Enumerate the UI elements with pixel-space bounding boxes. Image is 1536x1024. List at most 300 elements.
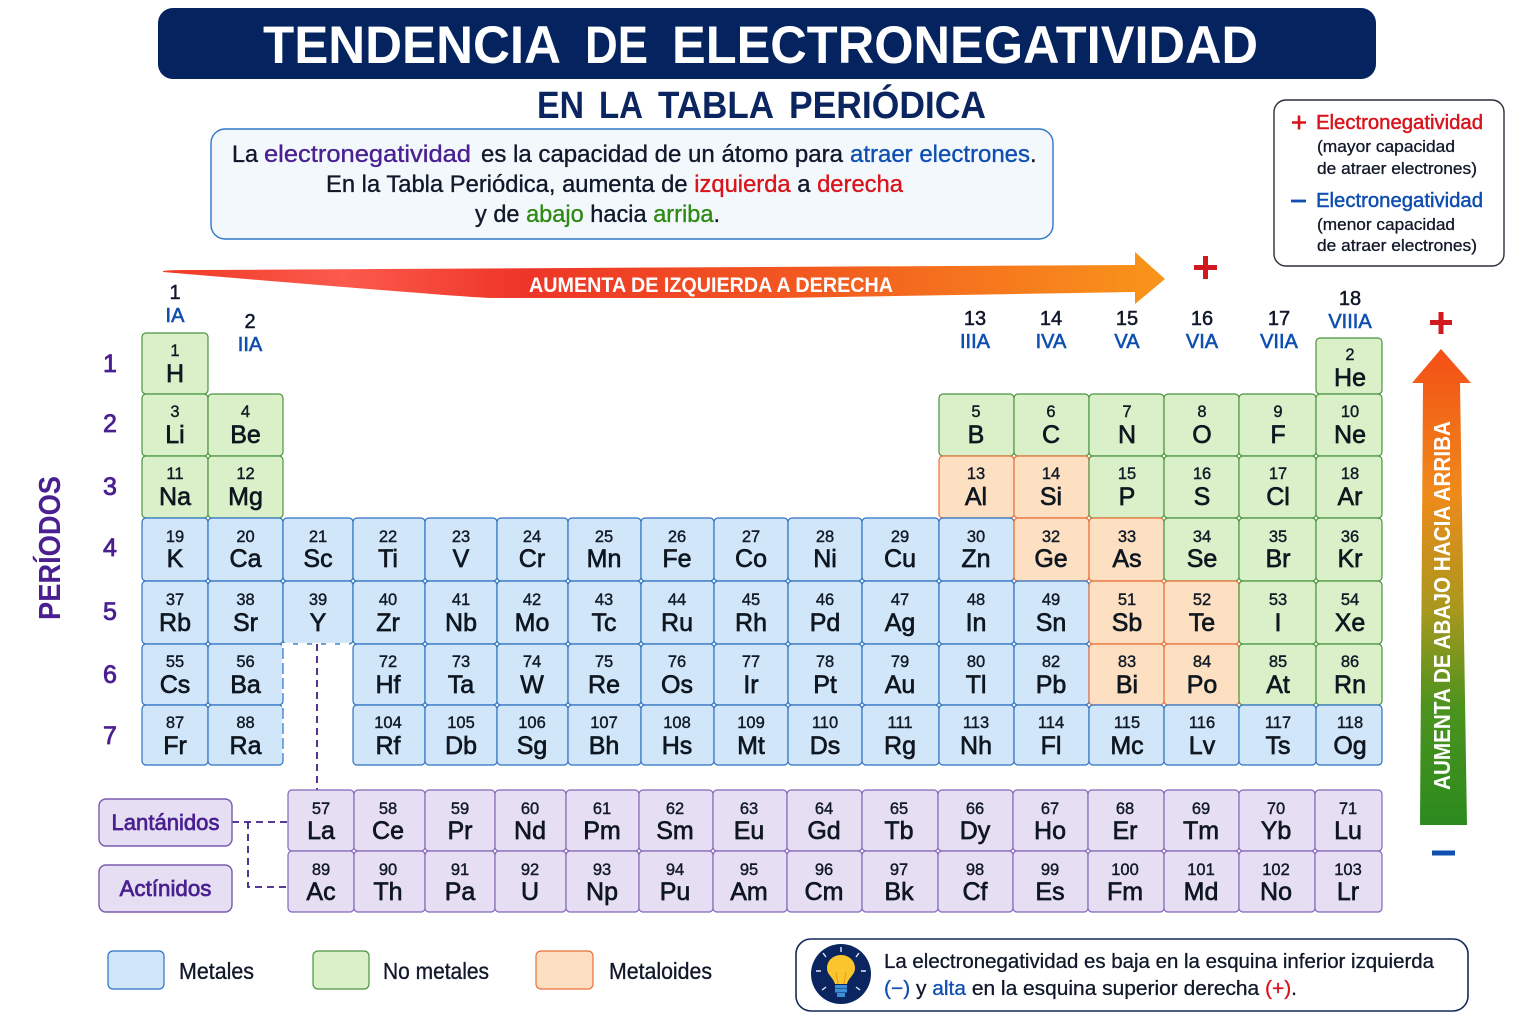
period 5: Sr: [233, 609, 258, 637]
panel: electronegativity key: [1274, 100, 1504, 266]
group headers: 1: [169, 282, 181, 304]
f-block: lanthanides: 61: [593, 800, 611, 818]
period 7: Hs: [662, 732, 692, 760]
f-block: lanthanides: Er: [1112, 817, 1138, 845]
period 6: Os: [661, 671, 693, 699]
period 2: 5: [971, 403, 981, 421]
period 5: 46: [816, 591, 834, 609]
period 4: 19: [166, 528, 184, 546]
period 6: 85: [1269, 653, 1287, 671]
period 3: 11: [166, 465, 184, 483]
period 6: 79: [891, 653, 909, 671]
period 6: Rn: [1334, 671, 1366, 699]
f-block: actinides: Cf: [962, 878, 988, 906]
period 7: Ts: [1266, 732, 1290, 760]
period 7: 111: [887, 714, 913, 732]
period 7: 113: [963, 714, 989, 732]
period 6: Pb: [1036, 671, 1066, 699]
f-block: lanthanides: 62: [666, 800, 684, 818]
f-block: actinides: Np: [586, 878, 618, 906]
period numbers: 6: [103, 661, 117, 689]
f-block: lanthanides: Sm: [656, 817, 694, 845]
period 5: 41: [452, 591, 470, 609]
period 6: 75: [595, 653, 613, 671]
panel: definition: .: [1030, 141, 1037, 168]
period 6: 72: [379, 653, 397, 671]
period 4: Mn: [587, 545, 621, 573]
period numbers: 2: [103, 410, 117, 438]
period 7: Bh: [589, 732, 619, 760]
f-block: actinides: No: [1260, 878, 1292, 906]
period 6: Au: [885, 671, 915, 699]
period 4: Ca: [230, 545, 262, 573]
period 5: 52: [1193, 591, 1211, 609]
period 4: 34: [1193, 528, 1211, 546]
period 6: Tl: [966, 671, 986, 699]
group headers: VA: [1114, 331, 1140, 353]
f-block: lanthanides: Nd: [514, 817, 546, 845]
dashed connectors: [232, 644, 353, 887]
f-block: actinides: 95: [740, 861, 758, 879]
f-block: lanthanides: Dy: [960, 817, 991, 845]
period 4: 20: [236, 528, 255, 546]
period 2: O: [1192, 421, 1212, 449]
period 7: 109: [737, 714, 765, 732]
period 4: Cr: [519, 545, 545, 573]
period 5: I: [1275, 609, 1281, 637]
f-block: lanthanides: 60: [521, 800, 539, 818]
period 3: Al: [965, 483, 987, 511]
f-block: actinides: Cm: [805, 878, 843, 906]
period 5: Ru: [661, 609, 693, 637]
group headers: 2: [244, 311, 256, 333]
f-block: actinides: 97: [890, 861, 908, 879]
period numbers: 1: [103, 350, 117, 378]
period 1: H: [166, 360, 184, 388]
periodic table: main block: [142, 333, 1382, 765]
period 2: 8: [1197, 403, 1207, 421]
f-block: lanthanides: Ce: [372, 817, 404, 845]
f-block: lanthanides: La: [307, 817, 335, 845]
period 2: 3: [170, 403, 180, 421]
period 3: Ar: [1338, 483, 1362, 511]
period 7: 105: [447, 714, 475, 732]
legend: metals: [108, 951, 254, 989]
period 3: Cl: [1266, 483, 1290, 511]
legend: metalloids: [536, 951, 712, 989]
period 5: Rh: [735, 609, 767, 637]
period 7: Nh: [960, 732, 992, 760]
period 4: K: [167, 545, 184, 573]
period 5: Ag: [885, 609, 915, 637]
period 6: 82: [1042, 653, 1060, 671]
period 3: 12: [236, 465, 255, 483]
period 5: 43: [595, 591, 613, 609]
f-block: actinides: 91: [451, 861, 469, 879]
period 2: 6: [1046, 403, 1056, 421]
group headers: IIIA: [960, 331, 991, 353]
period 5: [142, 581, 1382, 644]
period numbers: 4: [103, 534, 117, 562]
panel: definition: atraer electrones: [850, 141, 1030, 168]
period 5: 38: [236, 591, 255, 609]
title banner: DE: [585, 16, 648, 75]
f-block: lanthanides: 59: [451, 800, 469, 818]
period 4: 30: [967, 528, 985, 546]
period 3: 15: [1118, 465, 1136, 483]
period 1: 2: [1345, 346, 1355, 364]
f-block: actinides: Th: [373, 878, 403, 906]
group headers: 15: [1116, 308, 1138, 330]
period 5: Sn: [1036, 609, 1066, 637]
f-block: lanthanides: Gd: [807, 817, 841, 845]
group headers: IA: [166, 305, 185, 327]
subtitle: [537, 83, 986, 127]
f-block: actinides: Pu: [660, 878, 690, 906]
period 6: [142, 644, 1382, 705]
icon: plus top: [1430, 312, 1452, 334]
period 5: Te: [1189, 609, 1215, 637]
period 4: 24: [523, 528, 541, 546]
period 3: 14: [1042, 465, 1060, 483]
period 7: 107: [590, 714, 618, 732]
f-block: actinides: 99: [1041, 861, 1059, 879]
f-block: lanthanides: [288, 790, 1382, 851]
period 4: Se: [1187, 545, 1217, 573]
period 1: He: [1334, 364, 1366, 392]
group headers: 18: [1339, 288, 1361, 310]
subtitle: EN: [537, 85, 584, 127]
period 5: Rb: [159, 609, 191, 637]
period numbers: 3: [103, 473, 117, 501]
legend: non-metals: [313, 951, 489, 989]
f-block: actinides: Am: [730, 878, 768, 906]
group headers: VIA: [1186, 331, 1219, 353]
period 7: 108: [663, 714, 691, 732]
f-block: lanthanides: Pr: [448, 817, 472, 845]
period 6: Pt: [813, 671, 837, 699]
f-block: lanthanides: 65: [890, 800, 908, 818]
period 5: In: [966, 609, 986, 637]
f-block: lanthanides: 69: [1192, 800, 1210, 818]
f-block: actinides: 103: [1334, 861, 1362, 879]
f-block: lanthanides: 71: [1339, 800, 1357, 818]
legend: non-metals: No metales: [383, 958, 489, 984]
period 6: Hf: [376, 671, 401, 699]
period 3: 13: [967, 465, 985, 483]
f-block: actinides: Pa: [445, 878, 475, 906]
panel: definition: [211, 129, 1053, 239]
period 7: 117: [1265, 714, 1291, 732]
arrow: bottom to top: AUMENTA DE ABAJO HACIA ARRIBA: [1429, 421, 1455, 790]
group headers: VIIA: [1260, 331, 1299, 353]
f-block: actinides: Ac: [306, 878, 336, 906]
period 7: 118: [1337, 714, 1363, 732]
group headers: 17: [1268, 308, 1290, 330]
period 4: Ti: [378, 545, 398, 573]
period 3: Si: [1040, 483, 1062, 511]
period 6: 80: [967, 653, 985, 671]
period 5: 40: [379, 591, 397, 609]
period 6: Bi: [1116, 671, 1138, 699]
period 6: 73: [452, 653, 470, 671]
period 4: Ge: [1034, 545, 1068, 573]
period 5: Xe: [1335, 609, 1365, 637]
period 4: [142, 518, 1382, 581]
f-block: lanthanides: Tb: [884, 817, 914, 845]
legend: metals: Metales: [179, 958, 254, 984]
period 7: Mt: [737, 732, 765, 760]
period 7: Mc: [1110, 732, 1144, 760]
period 7: [142, 705, 1382, 765]
f-block: lanthanides: 58: [379, 800, 397, 818]
period 7: Db: [445, 732, 477, 760]
f-block: actinides: U: [521, 878, 539, 906]
period 5: 45: [742, 591, 760, 609]
period 2: Be: [230, 421, 261, 449]
icon: plus right: [1194, 256, 1217, 279]
period 2: 10: [1341, 403, 1359, 421]
period 7: Ds: [810, 732, 840, 760]
f-block: actinides: Lr: [1337, 878, 1359, 906]
period 2: B: [968, 421, 984, 449]
period 6: 55: [166, 653, 184, 671]
period 5: 42: [523, 591, 541, 609]
f-block: lanthanides: 63: [740, 800, 758, 818]
period 6: Ir: [743, 671, 759, 699]
panel: electronegativity key: (mayor capacidad: [1317, 137, 1455, 156]
period 4: 21: [309, 528, 327, 546]
group headers: 14: [1040, 308, 1062, 330]
f-block: lanthanides: 68: [1116, 800, 1134, 818]
subtitle: PERIÓDICA: [789, 83, 986, 127]
period 3: P: [1119, 483, 1135, 511]
period 6: At: [1266, 671, 1290, 699]
period 4: 36: [1341, 528, 1359, 546]
period 4: 25: [595, 528, 613, 546]
period 4: As: [1112, 545, 1142, 573]
period 6: Ta: [448, 671, 474, 699]
subtitle: TABLA: [658, 85, 774, 127]
period 7: 104: [374, 714, 402, 732]
panel: electronegativity key: Electronegatividad: [1316, 112, 1483, 134]
f-block: actinides: 92: [521, 861, 539, 879]
period 5: Mo: [515, 609, 549, 637]
f-block: lanthanides: Eu: [734, 817, 764, 845]
f-block: lanthanides: Pm: [583, 817, 621, 845]
subtitle: LA: [599, 85, 643, 127]
period 5: 49: [1042, 591, 1060, 609]
period 7: 116: [1189, 714, 1215, 732]
f-block: actinides: Es: [1035, 878, 1065, 906]
period 7: Ra: [230, 732, 262, 760]
period numbers: 7: [103, 722, 117, 750]
period 4: Co: [735, 545, 767, 573]
f-block: lanthanides: 64: [815, 800, 833, 818]
period 3: 16: [1193, 465, 1211, 483]
period 5: Sb: [1112, 609, 1142, 637]
f-block: actinides: 98: [966, 861, 984, 879]
f-block: actinides: Fm: [1107, 878, 1143, 906]
panel: electronegativity key: de atraer electrones): [1317, 236, 1477, 255]
period 6: W: [520, 671, 544, 699]
period 6: Po: [1187, 671, 1217, 699]
callout: summary: (−) y alta en la esquina superior derecha (+).: [884, 977, 1297, 1000]
period numbers: [103, 350, 117, 750]
period 5: 47: [891, 591, 909, 609]
period 4: 23: [452, 528, 470, 546]
f-block: lanthanides: 70: [1267, 800, 1285, 818]
period 4: 32: [1042, 528, 1060, 546]
period 7: Rf: [376, 732, 401, 760]
period 7: 114: [1038, 714, 1064, 732]
period numbers: 5: [103, 598, 117, 626]
panel: electronegativity key: Electronegatividad: [1316, 190, 1483, 212]
period 4: Fe: [662, 545, 692, 573]
period 4: 28: [816, 528, 834, 546]
period 3: S: [1194, 483, 1210, 511]
period 2: [142, 394, 1382, 456]
label: actinides: Actínidos: [120, 876, 212, 901]
period 1: 1: [170, 342, 180, 360]
f-block: actinides: 90: [379, 861, 397, 879]
period 7: Sg: [517, 732, 547, 760]
period 4: 22: [379, 528, 397, 546]
arrow: left to right: AUMENTA DE IZQUIERDA A DERECHA: [529, 274, 893, 297]
group headers: [166, 282, 1372, 356]
axis title: periods: PERÍODOS: [32, 476, 67, 620]
period 2: C: [1042, 421, 1060, 449]
period 5: 51: [1118, 591, 1136, 609]
f-block: lanthanides: 66: [966, 800, 984, 818]
callout: summary: [796, 939, 1468, 1011]
period 5: Pd: [810, 609, 840, 637]
period 7: 106: [518, 714, 546, 732]
group headers: IIA: [238, 334, 263, 356]
f-block: actinides: 96: [815, 861, 833, 879]
f-block: lanthanides: Lu: [1334, 817, 1362, 845]
period 4: Sc: [303, 545, 333, 573]
period 3: 17: [1269, 465, 1287, 483]
period 4: Kr: [1338, 545, 1362, 573]
period 4: Zn: [961, 545, 991, 573]
period 4: 35: [1269, 528, 1287, 546]
period 6: 78: [816, 653, 834, 671]
panel: definition: La: [232, 141, 259, 168]
period 5: 44: [668, 591, 686, 609]
period 3: [142, 456, 1382, 518]
panel: definition: electronegatividad: [264, 141, 471, 168]
title banner: ELECTRONEGATIVIDAD: [672, 16, 1258, 75]
period 6: 56: [236, 653, 255, 671]
period 2: F: [1270, 421, 1286, 449]
panel: electronegativity key: de atraer electrones): [1317, 159, 1477, 178]
title banner: TENDENCIA: [263, 16, 561, 75]
period 5: Y: [310, 609, 327, 637]
period 7: 88: [236, 714, 255, 732]
label: lanthanides: Lantánidos: [112, 810, 220, 835]
period 4: 33: [1118, 528, 1136, 546]
period 6: Re: [588, 671, 620, 699]
period 2: 4: [241, 403, 250, 421]
period 2: 7: [1122, 403, 1132, 421]
period 6: 77: [742, 653, 760, 671]
period 7: Rg: [884, 732, 916, 760]
period 6: 86: [1341, 653, 1359, 671]
arrow: bottom to top: [1412, 349, 1471, 825]
title banner: [158, 8, 1376, 79]
period 7: Fl: [1041, 732, 1061, 760]
panel: definition: es la capacidad de un átomo para: [481, 141, 844, 168]
period 1: [142, 333, 1382, 394]
period 2: N: [1118, 421, 1136, 449]
f-block: actinides: 102: [1262, 861, 1290, 879]
group headers: 16: [1191, 308, 1213, 330]
period 2: Li: [165, 421, 185, 449]
period 5: Tc: [592, 609, 616, 637]
period 4: 27: [742, 528, 760, 546]
panel: definition: En la Tabla Periódica, aumenta de izquierda a derecha: [326, 171, 904, 198]
f-block: lanthanides: 57: [312, 800, 330, 818]
period 4: Ni: [813, 545, 837, 573]
period 7: Fr: [163, 732, 187, 760]
f-block: lanthanides: 67: [1041, 800, 1059, 818]
f-block: actinides: 94: [666, 861, 684, 879]
period 7: 110: [812, 714, 838, 732]
f-block: actinides: [288, 851, 1382, 912]
f-block: lanthanides: Ho: [1034, 817, 1066, 845]
period 4: V: [453, 545, 470, 573]
period 7: Lv: [1189, 732, 1216, 760]
period 5: 54: [1341, 591, 1359, 609]
period 3: Na: [159, 483, 191, 511]
icon: light bulb: [811, 944, 871, 1004]
f-block: actinides: 100: [1111, 861, 1139, 879]
period 6: 76: [668, 653, 686, 671]
period 7: Og: [1333, 732, 1367, 760]
f-block: actinides: 89: [312, 861, 330, 879]
period 3: 18: [1341, 465, 1359, 483]
period 7: 87: [166, 714, 184, 732]
f-block: actinides: Md: [1184, 878, 1218, 906]
period 6: Cs: [160, 671, 190, 699]
panel: electronegativity key: (menor capacidad: [1317, 215, 1455, 234]
f-block: lanthanides: Tm: [1183, 817, 1219, 845]
f-block: actinides: Bk: [884, 878, 914, 906]
panel: definition: y de abajo hacia arriba.: [475, 201, 720, 228]
period 6: 83: [1118, 653, 1136, 671]
period 2: Ne: [1334, 421, 1366, 449]
period 7: 115: [1114, 714, 1140, 732]
f-block: actinides: 93: [593, 861, 611, 879]
legend: metalloids: Metaloides: [609, 958, 712, 984]
period 5: 53: [1269, 591, 1287, 609]
period 4: Br: [1266, 545, 1290, 573]
period 6: 84: [1193, 653, 1211, 671]
period 2: 9: [1273, 403, 1283, 421]
period 3: Mg: [228, 483, 263, 511]
callout: summary: La electronegatividad es baja en la esquina inferior izquierda: [884, 950, 1435, 973]
period 6: Ba: [230, 671, 261, 699]
f-block: lanthanides: Yb: [1261, 817, 1291, 845]
period 5: Zr: [376, 609, 400, 637]
period 5: 37: [166, 591, 184, 609]
period 5: 48: [967, 591, 985, 609]
f-block: actinides: 101: [1187, 861, 1215, 879]
period 5: Nb: [445, 609, 477, 637]
period 5: 39: [309, 591, 327, 609]
period 6: 74: [523, 653, 541, 671]
